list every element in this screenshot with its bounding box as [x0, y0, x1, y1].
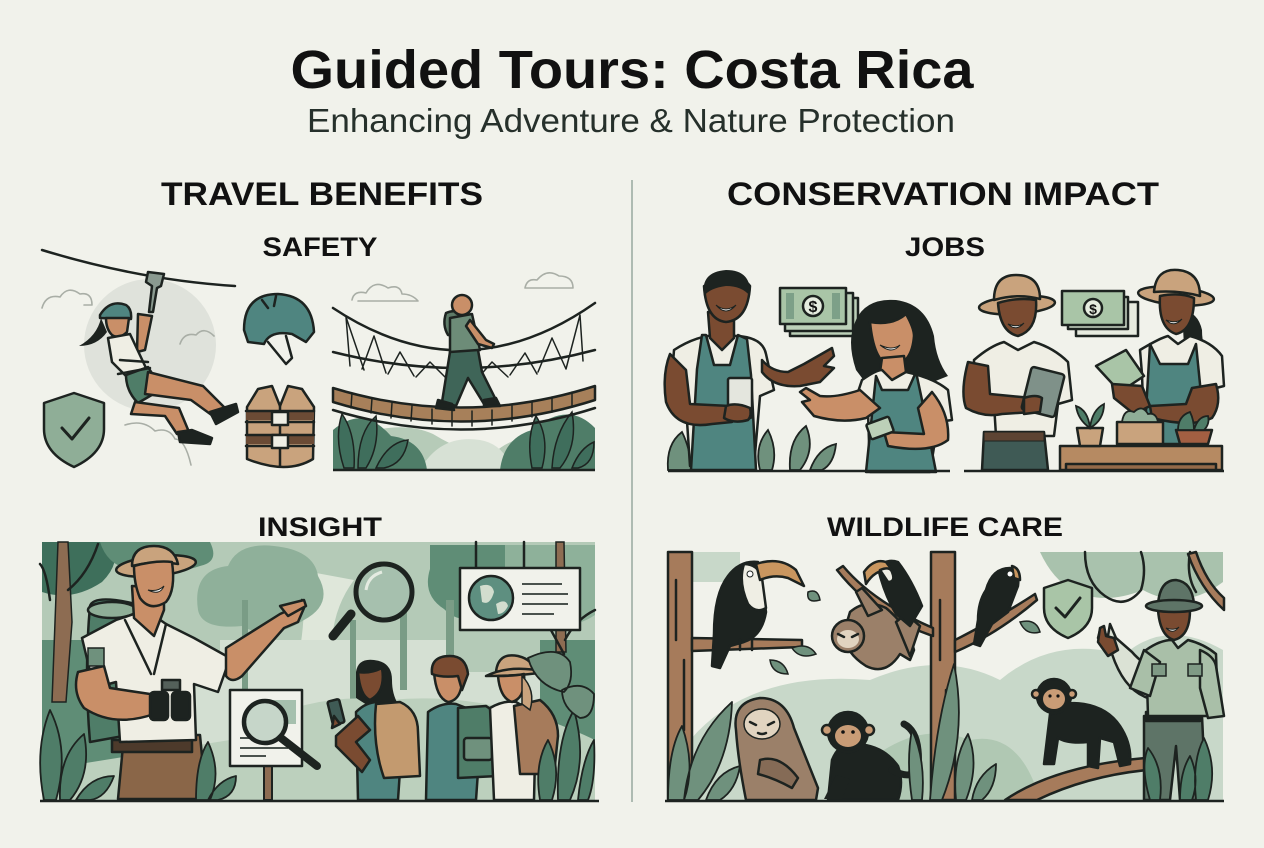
- toucan small on branch: [864, 561, 922, 626]
- centre divider: [631, 180, 633, 802]
- subheading: safety: SAFETY: [262, 232, 378, 262]
- ranger: [1098, 580, 1224, 800]
- panel: wildlife care: [665, 552, 1224, 801]
- market stall: [1060, 404, 1222, 470]
- zipline scene: [42, 250, 238, 465]
- worker with cup: [665, 270, 834, 470]
- heading: travel benefits: TRAVEL BENEFITS: [161, 176, 483, 212]
- icon: shield: [44, 393, 104, 467]
- monkey on branch: [1032, 679, 1130, 768]
- worker woman: [758, 300, 952, 472]
- guide pointing: [76, 546, 306, 799]
- sloth hanging: [832, 588, 920, 669]
- subheading: wildlife care: WILDLIFE CARE: [827, 512, 1063, 542]
- toucan large: [712, 561, 804, 668]
- icon: life vest: [246, 386, 314, 467]
- subheading: jobs: JOBS: [905, 232, 985, 262]
- icon: cash stack left: $: [809, 299, 818, 316]
- panel: jobs: [665, 270, 1224, 472]
- panel: insight: [40, 542, 599, 801]
- forest background: [667, 552, 1223, 800]
- icon: magnifying glass large: [333, 564, 412, 636]
- panel: safety: [42, 250, 595, 470]
- icon: cash note right: [1062, 291, 1138, 336]
- icon: cash note right: $: [1089, 301, 1097, 317]
- subtitle: Enhancing Adventure & Nature Protection: [307, 102, 955, 139]
- visitor group: [327, 655, 558, 800]
- title: Guided Tours: Costa Rica: [290, 40, 974, 100]
- sloth on ground: [736, 698, 818, 800]
- monkey sitting: [822, 712, 918, 800]
- forest background: [40, 542, 595, 800]
- vendor woman: [1096, 270, 1224, 444]
- sign with magnifier: [230, 690, 317, 800]
- ranger with tablet: [963, 275, 1072, 470]
- info board with globe: [460, 568, 580, 630]
- subheading: insight: INSIGHT: [258, 512, 383, 542]
- rope bridge scene: [333, 273, 595, 470]
- parrot: [974, 566, 1020, 646]
- foreground foliage: [40, 652, 594, 800]
- tree trunks: [668, 552, 1224, 800]
- icon: helmet: [244, 294, 314, 364]
- foreground foliage: [668, 664, 1212, 800]
- icon: shield: [1044, 580, 1092, 638]
- heading: conservation impact: CONSERVATION IMPACT: [727, 176, 1160, 212]
- icon: cash stack left: [780, 288, 858, 336]
